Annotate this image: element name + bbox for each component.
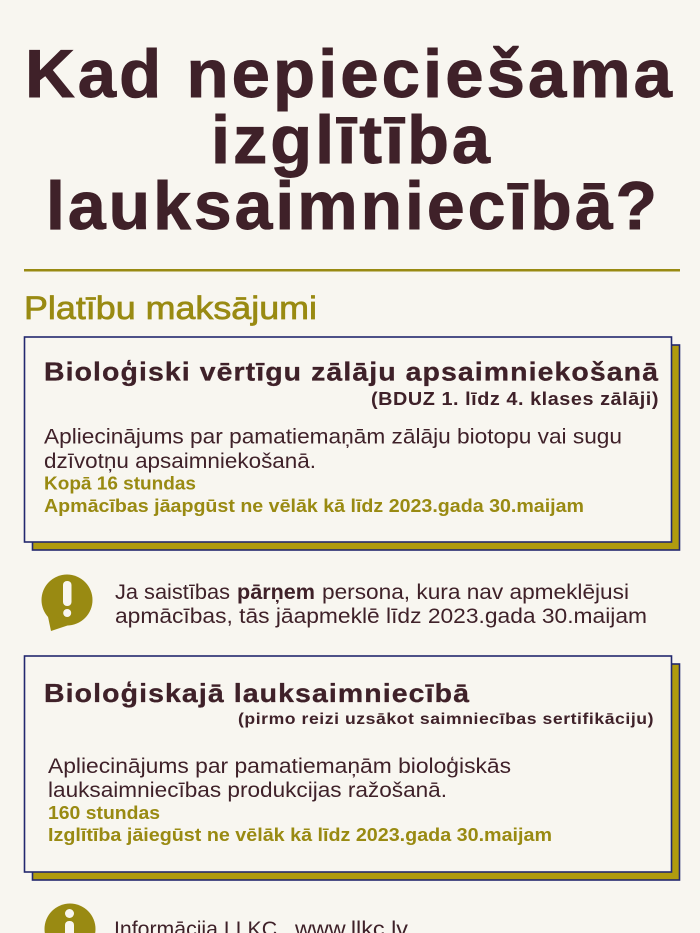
notice text xyxy=(115,580,647,628)
panel heading: Bioloģiski vērtīgu zālāju apsaimniekošanā xyxy=(44,356,659,386)
title: Kad nepieciešama xyxy=(25,36,675,112)
panel requirement text: Apmācības jāapgūst ne vēlāk kā līdz 2023.gada 30.maijam xyxy=(44,496,584,516)
panel shadow xyxy=(32,345,680,550)
panel subheading: (BDUZ 1. līdz 4. klases zālāji) xyxy=(371,389,659,409)
panel requirement text: Izglītība jāiegūst ne vēlāk kā līdz 2023.gada 30.maijam xyxy=(48,825,552,845)
panel body text xyxy=(44,424,622,473)
panel requirement text xyxy=(48,803,552,845)
panel subheading: (pirmo reizi uzsākot saimniecības sertifikāciju) xyxy=(238,711,654,728)
panel body text: dzīvotņu apsaimniekošanā. xyxy=(44,449,316,473)
panel requirement text: Kopā 16 stundas xyxy=(44,474,196,494)
panel: organic farming xyxy=(24,656,680,880)
notice text: pārņem xyxy=(237,580,315,604)
panel: grassland management xyxy=(24,337,680,550)
notice text: Ja saistības xyxy=(115,580,230,604)
title xyxy=(25,36,675,244)
notice text: persona, kura nav apmeklējusi xyxy=(322,580,629,604)
notice text: apmācības, tās jāapmeklē līdz 2023.gada 30.maijam xyxy=(115,604,647,628)
panel shadow xyxy=(32,664,680,880)
panel heading: Bioloģiskajā lauksaimniecībā xyxy=(44,678,470,708)
title: lauksaimniecībā? xyxy=(46,168,660,244)
panel body text: Apliecinājums par pamatiemaņām bioloģiskās xyxy=(48,754,511,778)
section heading: Platību maksājumi xyxy=(24,290,317,326)
panel box xyxy=(24,337,672,542)
title: izglītība xyxy=(211,102,493,178)
panel box xyxy=(24,656,672,872)
icon: exclamation speech bubble xyxy=(42,574,92,631)
panel requirement text xyxy=(44,474,584,516)
icon: info circle xyxy=(44,904,96,933)
footer information text xyxy=(114,917,408,933)
panel body text: Apliecinājums par pamatiemaņām zālāju biotopu vai sugu xyxy=(44,424,622,448)
panel requirement text: 160 stundas xyxy=(48,803,160,823)
panel body text: lauksaimniecības produkcijas ražošanā. xyxy=(48,778,447,802)
panel body text xyxy=(48,754,511,802)
